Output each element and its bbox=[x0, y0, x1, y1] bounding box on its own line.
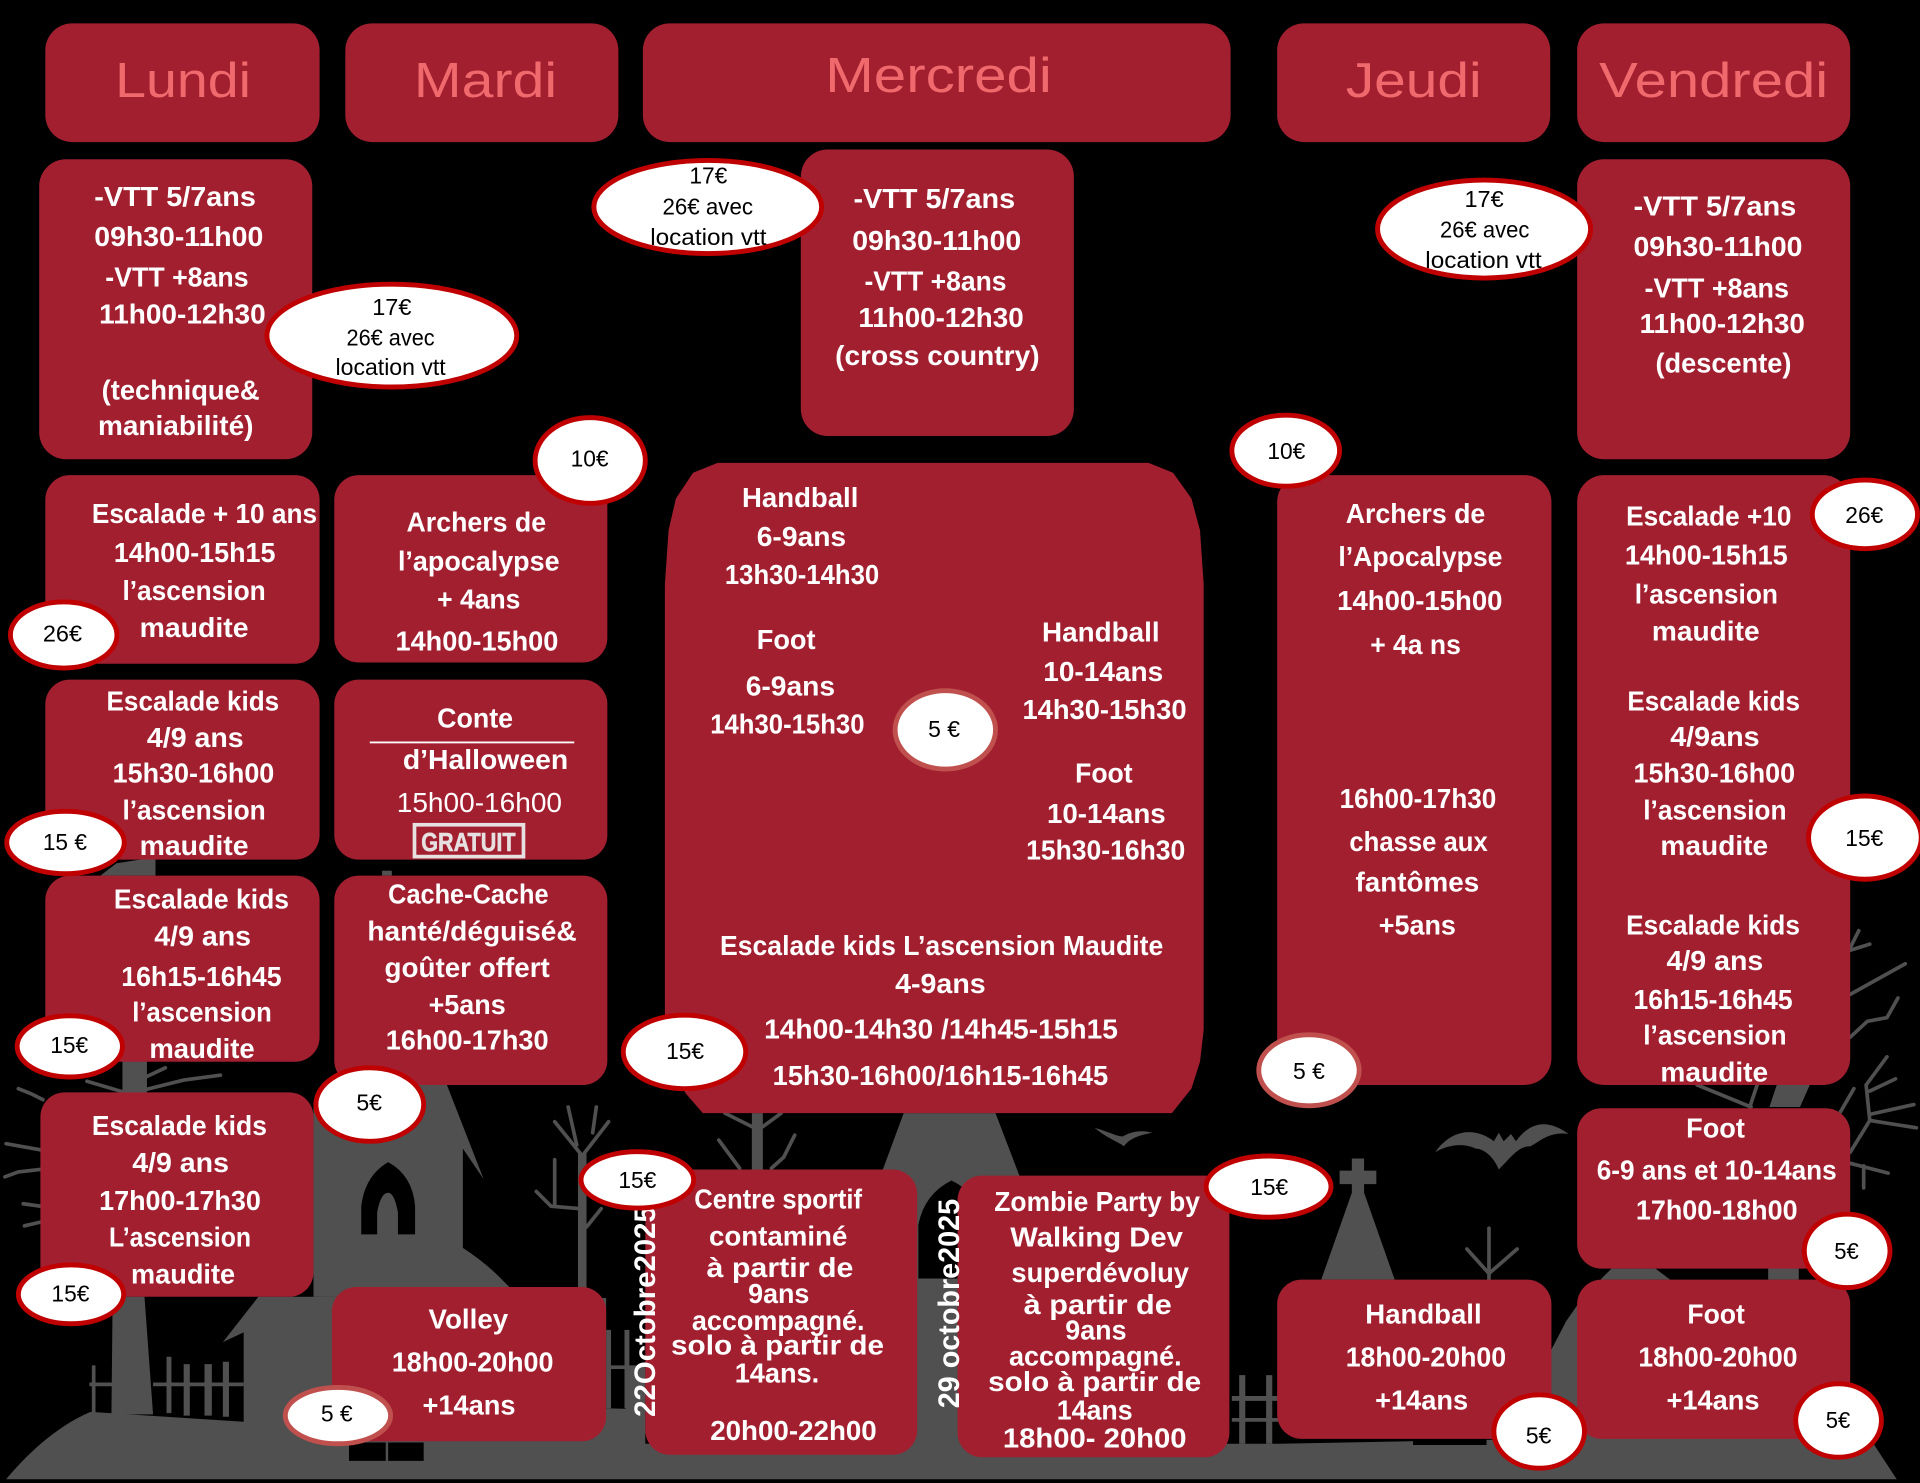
panel: Centre sportif contaminé: accompagné. bbox=[692, 1305, 864, 1336]
panel: Mercredi activités: 6-9ans bbox=[757, 521, 846, 552]
panel: Vendredi escalade: Escalade +10 bbox=[1626, 500, 1791, 531]
header: Mercredi: Mercredi bbox=[825, 49, 1052, 103]
panel: Mercredi activités: 10-14ans bbox=[1047, 798, 1166, 829]
price: Lundi kids 15h30 bbox=[7, 811, 124, 874]
price: Mercredi handball et foot bbox=[895, 691, 996, 769]
panel: Zombie Party: Walking Dev bbox=[1010, 1222, 1184, 1253]
price: Mercredi escalade bbox=[623, 1015, 746, 1089]
price: Lundi VTT bbox=[267, 284, 517, 387]
panel: Mercredi activités: Handball bbox=[742, 482, 858, 513]
panel: Vendredi VTT: (descente) bbox=[1656, 347, 1791, 378]
panel: Lundi escalade kids 15h30: maudite bbox=[140, 830, 249, 861]
header: Mardi: Mardi bbox=[414, 54, 557, 108]
panel: Vendredi foot 17h00: 6-9 ans et 10-14ans bbox=[1597, 1154, 1837, 1185]
panel: Mardi volley bbox=[332, 1287, 606, 1441]
panel: Lundi escalade +10 ans: 14h00-15h15 bbox=[114, 537, 276, 568]
panel: Jeudi archers et chasse aux fantômes: + 4a ns bbox=[1370, 629, 1461, 660]
panel: Lundi escalade kids 15h30: 15h30-16h00 bbox=[113, 758, 274, 789]
panel: Vendredi VTT: -VTT +8ans bbox=[1644, 273, 1789, 304]
price: Lundi escalade +10: 26€ bbox=[43, 621, 82, 647]
panel: Vendredi foot 18h00: +14ans bbox=[1667, 1384, 1760, 1415]
price: Mardi cache-cache bbox=[316, 1068, 424, 1141]
panel: Lundi VTT: -VTT 5/7ans bbox=[94, 181, 256, 212]
panel: Zombie Party: solo à partir de bbox=[988, 1366, 1201, 1397]
panel: Vendredi escalade: Escalade kids bbox=[1626, 909, 1800, 940]
panel: Lundi escalade kids 16h15: 16h15-16h45 bbox=[121, 961, 282, 992]
panel: Vendredi escalade: l’ascension bbox=[1635, 579, 1778, 610]
price: Jeudi archers bbox=[1232, 415, 1340, 486]
panel: Lundi escalade kids 17h00: Escalade kids bbox=[92, 1110, 267, 1141]
price: Vendredi foot 18h00 bbox=[1796, 1384, 1881, 1457]
panel: Lundi escalade kids 15h30: 4/9 ans bbox=[147, 722, 244, 753]
price: Mardi archers: 10€ bbox=[571, 446, 609, 472]
panel: Mercredi VTT: 11h00-12h30 bbox=[858, 302, 1024, 333]
panel: Lundi escalade kids 16h15: maudite bbox=[149, 1033, 255, 1064]
panel: Jeudi archers et chasse aux fantômes: Archers de bbox=[1346, 498, 1485, 529]
price: Jeudi archers: 10€ bbox=[1267, 438, 1305, 464]
panel: Vendredi escalade: maudite bbox=[1660, 1056, 1768, 1087]
price: Mercredi VTT: location vtt bbox=[650, 224, 767, 250]
price: Mardi cache-cache: 5€ bbox=[356, 1090, 382, 1116]
panel: Vendredi VTT bbox=[1577, 159, 1850, 459]
price: Lundi kids 16h15: 15€ bbox=[50, 1032, 88, 1058]
panel: Zombie Party: 14ans bbox=[1057, 1394, 1133, 1425]
panel: Centre sportif contaminé: solo à partir de bbox=[671, 1329, 884, 1360]
panel: Mardi archers: l’apocalypse bbox=[398, 546, 560, 577]
panel: Vendredi escalade: 15h30-16h00 bbox=[1633, 758, 1795, 789]
panel: Lundi escalade +10 ans: maudite bbox=[140, 612, 249, 643]
date: 29 octobre 2025: 29 octobre2025 bbox=[933, 1199, 966, 1408]
header: Mardi bbox=[345, 23, 618, 142]
panel: Lundi VTT bbox=[39, 159, 312, 459]
panel: Centre sportif contaminé: 9ans bbox=[748, 1278, 809, 1309]
panel: Zombie Party bbox=[958, 1176, 1229, 1457]
panel: Centre sportif contaminé: contaminé bbox=[709, 1220, 847, 1251]
panel: Mardi conte d'Halloween: d’Halloween bbox=[403, 744, 568, 775]
price: Mercredi escalade: 15€ bbox=[666, 1038, 704, 1064]
panel: Mercredi activités: 15h30-16h00/16h15-16h45 bbox=[773, 1060, 1108, 1091]
price: Mardi volley bbox=[285, 1387, 391, 1444]
panel: Jeudi archers et chasse aux fantômes bbox=[1277, 475, 1551, 1085]
panel: Zombie Party: à partir de bbox=[1024, 1289, 1172, 1320]
panel: Vendredi foot 17h00: 17h00-18h00 bbox=[1636, 1195, 1798, 1226]
header row: days of the week bbox=[45, 23, 1850, 142]
panel: Zombie Party: superdévoluy bbox=[1011, 1257, 1190, 1288]
panel: Mercredi VTT: 09h30-11h00 bbox=[852, 225, 1021, 256]
panel: Centre sportif contaminé bbox=[645, 1169, 917, 1455]
price: Vendredi kids bbox=[1809, 796, 1920, 879]
panel: Vendredi escalade: 4/9 ans bbox=[1667, 945, 1763, 976]
price: Vendredi escalade +10: 26€ bbox=[1845, 502, 1883, 528]
panel: Jeudi handball bbox=[1277, 1280, 1551, 1439]
panel: Mercredi activités: 6-9ans bbox=[746, 671, 835, 702]
price: Jeudi chasse aux fantômes bbox=[1259, 1035, 1359, 1106]
panel: Lundi VTT: maniabilité) bbox=[98, 410, 253, 441]
price: Vendredi escalade +10 bbox=[1812, 480, 1918, 549]
panel: Lundi VTT: -VTT +8ans bbox=[105, 262, 249, 293]
panel: Mercredi activités: 15h30-16h30 bbox=[1026, 835, 1185, 866]
panel: Mardi cache-cache: +5ans bbox=[429, 989, 506, 1020]
price: Mercredi VTT bbox=[594, 160, 822, 254]
panel: Vendredi escalade: 4/9ans bbox=[1670, 721, 1760, 752]
panel: Mercredi activités: 14h30-15h30 bbox=[1022, 694, 1187, 725]
panel: Lundi escalade kids 16h15: l’ascension bbox=[132, 996, 272, 1027]
panel: Vendredi foot 17h00 bbox=[1577, 1108, 1850, 1269]
panel: Lundi escalade kids 15h30 bbox=[45, 680, 320, 861]
panel: Mardi archers: 14h00-15h00 bbox=[396, 625, 558, 656]
price: Zombie Party bbox=[1206, 1156, 1331, 1217]
panel: Lundi escalade kids 15h30: Escalade kids bbox=[107, 685, 279, 716]
panel: Vendredi escalade: Escalade kids bbox=[1627, 685, 1800, 716]
panel: Mardi cache-cache: Cache-Cache bbox=[388, 879, 549, 910]
panel: Lundi escalade +10 ans bbox=[45, 475, 320, 664]
panel: Mercredi activités: 14h00-14h30 /14h45-15h15 bbox=[764, 1013, 1118, 1044]
price: Vendredi foot 18h00: 5€ bbox=[1826, 1407, 1850, 1433]
panel: Mercredi activités: Escalade kids L’ascension Maudite bbox=[720, 930, 1163, 961]
panel: Lundi VTT: 11h00-12h30 bbox=[99, 298, 266, 329]
panel: Mercredi activités: 14h30-15h30 bbox=[710, 709, 864, 740]
panel: Mercredi VTT bbox=[801, 149, 1074, 436]
price: Lundi escalade +10 bbox=[10, 602, 117, 668]
panel: Centre sportif contaminé: Centre sportif bbox=[694, 1184, 863, 1215]
price: Vendredi VTT bbox=[1378, 180, 1591, 278]
panel: Mercredi activités: 10-14ans bbox=[1043, 656, 1163, 687]
header: Jeudi: Jeudi bbox=[1346, 54, 1482, 108]
panel: Mardi cache-cache: goûter offert bbox=[384, 952, 550, 983]
price: Mardi archers bbox=[535, 418, 645, 503]
price: Lundi VTT: 17€ bbox=[372, 294, 411, 320]
panel: Vendredi escalade bbox=[1577, 475, 1850, 1087]
price: Jeudi handball: 5€ bbox=[1526, 1423, 1551, 1449]
panel: Vendredi foot 18h00 bbox=[1577, 1280, 1850, 1439]
badge: gratuit: GRATUIT bbox=[421, 829, 516, 857]
price: Lundi VTT: 26€ avec bbox=[347, 324, 435, 350]
header: Lundi bbox=[45, 23, 320, 142]
panel: Jeudi archers et chasse aux fantômes: l’Apocalypse bbox=[1338, 541, 1502, 572]
header: Vendredi bbox=[1577, 23, 1850, 142]
panel: Lundi escalade kids 17h00: 17h00-17h30 bbox=[99, 1185, 261, 1216]
window and door cut-outs in the silhouette bbox=[349, 1162, 1487, 1461]
panel: Jeudi archers et chasse aux fantômes: fantômes bbox=[1356, 866, 1479, 897]
price: Centre sportif bbox=[581, 1152, 694, 1208]
panel: Mercredi activités: Handball bbox=[1042, 617, 1160, 648]
panel: Mercredi activités: Foot bbox=[757, 624, 816, 655]
price: Mardi volley: 5 € bbox=[321, 1401, 353, 1427]
price: Centre sportif: 15€ bbox=[618, 1167, 656, 1193]
price: Mercredi VTT: 26€ avec bbox=[662, 193, 753, 219]
panel: Lundi escalade kids 17h00 bbox=[40, 1092, 313, 1297]
panel: Zombie Party: accompagné. bbox=[1009, 1340, 1182, 1371]
panel: Mardi conte d'Halloween: Conte bbox=[437, 702, 513, 733]
panel: Vendredi escalade: 14h00-15h15 bbox=[1625, 540, 1788, 571]
panel: Mardi archers: Archers de bbox=[407, 507, 546, 538]
panel: Zombie Party: 9ans bbox=[1065, 1315, 1127, 1346]
panel: Vendredi foot 17h00: Foot bbox=[1686, 1113, 1745, 1144]
panel: Mardi archers: + 4ans bbox=[437, 584, 520, 615]
panel: Vendredi escalade: l’ascension bbox=[1643, 794, 1787, 825]
price: Lundi kids 16h15 bbox=[17, 1016, 122, 1077]
panel: Jeudi handball: +14ans bbox=[1375, 1384, 1468, 1415]
panel: Mardi conte d'Halloween: 15h00-16h00 bbox=[397, 787, 562, 818]
panel: Vendredi escalade: l’ascension bbox=[1643, 1020, 1787, 1051]
panel: Jeudi archers et chasse aux fantômes: chasse aux bbox=[1349, 826, 1488, 857]
panel: Mercredi VTT: -VTT +8ans bbox=[864, 265, 1007, 296]
price: Lundi kids 17h00: 15€ bbox=[51, 1281, 89, 1307]
panel: Jeudi handball: Handball bbox=[1365, 1299, 1482, 1330]
price: Lundi kids 15h30: 15 € bbox=[43, 829, 87, 855]
panel: Mardi volley: +14ans bbox=[422, 1389, 516, 1420]
price: Vendredi foot 17h00 bbox=[1804, 1214, 1890, 1288]
price: Jeudi chasse aux fantômes: 5 € bbox=[1293, 1058, 1325, 1084]
panel: Lundi VTT: 09h30-11h00 bbox=[94, 221, 263, 252]
panel: Centre sportif contaminé: 20h00-22h00 bbox=[710, 1415, 877, 1446]
panel: Jeudi handball: 18h00-20h00 bbox=[1346, 1342, 1506, 1373]
panel: Vendredi escalade: maudite bbox=[1652, 615, 1760, 646]
panel: Mercredi activités bbox=[665, 463, 1204, 1113]
panel: Mercredi activités: Foot bbox=[1075, 758, 1133, 789]
panel: Lundi escalade kids 16h15 bbox=[45, 876, 320, 1064]
panel: Jeudi archers et chasse aux fantômes: 16h00-17h30 bbox=[1340, 783, 1496, 814]
price: Jeudi handball bbox=[1494, 1395, 1584, 1468]
panel: Mercredi VTT: -VTT 5/7ans bbox=[853, 183, 1015, 214]
price: Vendredi VTT: location vtt bbox=[1425, 247, 1542, 273]
price: Mercredi handball et foot: 5 € bbox=[928, 716, 960, 742]
panel: Mardi cache-cache bbox=[334, 876, 607, 1085]
panel: Vendredi foot 18h00: 18h00-20h00 bbox=[1638, 1342, 1798, 1373]
panel: Mardi archers bbox=[334, 475, 607, 663]
panel: Lundi escalade +10 ans: Escalade + 10 ans bbox=[92, 498, 317, 529]
panel: Lundi escalade kids 16h15: Escalade kids bbox=[114, 884, 289, 915]
panel: Zombie Party: Zombie Party by bbox=[994, 1186, 1201, 1217]
panel: Vendredi escalade: 16h15-16h45 bbox=[1633, 984, 1793, 1015]
header: Mercredi bbox=[643, 23, 1231, 142]
panel: Mercredi activités: 13h30-14h30 bbox=[725, 559, 879, 590]
panel: Vendredi foot 18h00: Foot bbox=[1687, 1299, 1745, 1330]
panel: Jeudi archers et chasse aux fantômes: 14h00-15h00 bbox=[1337, 585, 1502, 616]
price: Vendredi VTT: 26€ avec bbox=[1440, 217, 1530, 243]
panel: Jeudi archers et chasse aux fantômes: +5ans bbox=[1379, 909, 1456, 940]
panel: Mardi cache-cache: hanté/déguisé& bbox=[367, 915, 577, 946]
panel: Zombie Party: 18h00- 20h00 bbox=[1003, 1422, 1187, 1453]
panel: Vendredi escalade: maudite bbox=[1660, 830, 1768, 861]
background: haunted landscape silhouette bbox=[5, 857, 1916, 1479]
date: 22 octobre 2025: 22Octobre2025 bbox=[629, 1206, 662, 1417]
panel: Mardi volley: Volley bbox=[429, 1304, 509, 1335]
panel: Lundi escalade kids 15h30: l’ascension bbox=[122, 794, 266, 825]
header: Vendredi: Vendredi bbox=[1599, 54, 1828, 108]
panel: Mardi conte d'Halloween bbox=[334, 680, 607, 860]
price: Lundi kids 17h00 bbox=[18, 1265, 124, 1324]
panel: Lundi VTT: (technique& bbox=[102, 374, 260, 405]
panel: Vendredi VTT: 11h00-12h30 bbox=[1640, 308, 1805, 339]
header: Jeudi bbox=[1277, 23, 1550, 142]
panel: Mardi cache-cache: 16h00-17h30 bbox=[386, 1024, 549, 1055]
header: Lundi: Lundi bbox=[115, 54, 251, 108]
price: Mercredi VTT: 17€ bbox=[689, 163, 727, 189]
price: Vendredi foot 17h00: 5€ bbox=[1834, 1238, 1859, 1264]
price: Vendredi VTT: 17€ bbox=[1464, 186, 1504, 212]
price: Lundi VTT: location vtt bbox=[336, 354, 446, 380]
panel: Mercredi activités: 4-9ans bbox=[895, 968, 986, 999]
panel: Lundi escalade kids 17h00: maudite bbox=[131, 1258, 235, 1289]
panel: Mercredi VTT: (cross country) bbox=[835, 340, 1040, 371]
price: Vendredi kids: 15€ bbox=[1845, 825, 1883, 851]
price: Zombie Party: 15€ bbox=[1250, 1174, 1288, 1200]
panel: Centre sportif contaminé: à partir de bbox=[707, 1252, 853, 1283]
panel: Lundi escalade +10 ans: l’ascension bbox=[122, 575, 266, 606]
panel: Mardi volley: 18h00-20h00 bbox=[392, 1347, 553, 1378]
panel: Vendredi VTT: -VTT 5/7ans bbox=[1633, 191, 1796, 222]
panel: Lundi escalade kids 17h00: L’ascension bbox=[109, 1222, 251, 1253]
panel: Vendredi VTT: 09h30-11h00 bbox=[1633, 231, 1802, 262]
panel: Lundi escalade kids 17h00: 4/9 ans bbox=[132, 1147, 229, 1178]
panel: Centre sportif contaminé: 14ans. bbox=[735, 1358, 819, 1389]
panel: Lundi escalade kids 16h15: 4/9 ans bbox=[154, 920, 251, 951]
